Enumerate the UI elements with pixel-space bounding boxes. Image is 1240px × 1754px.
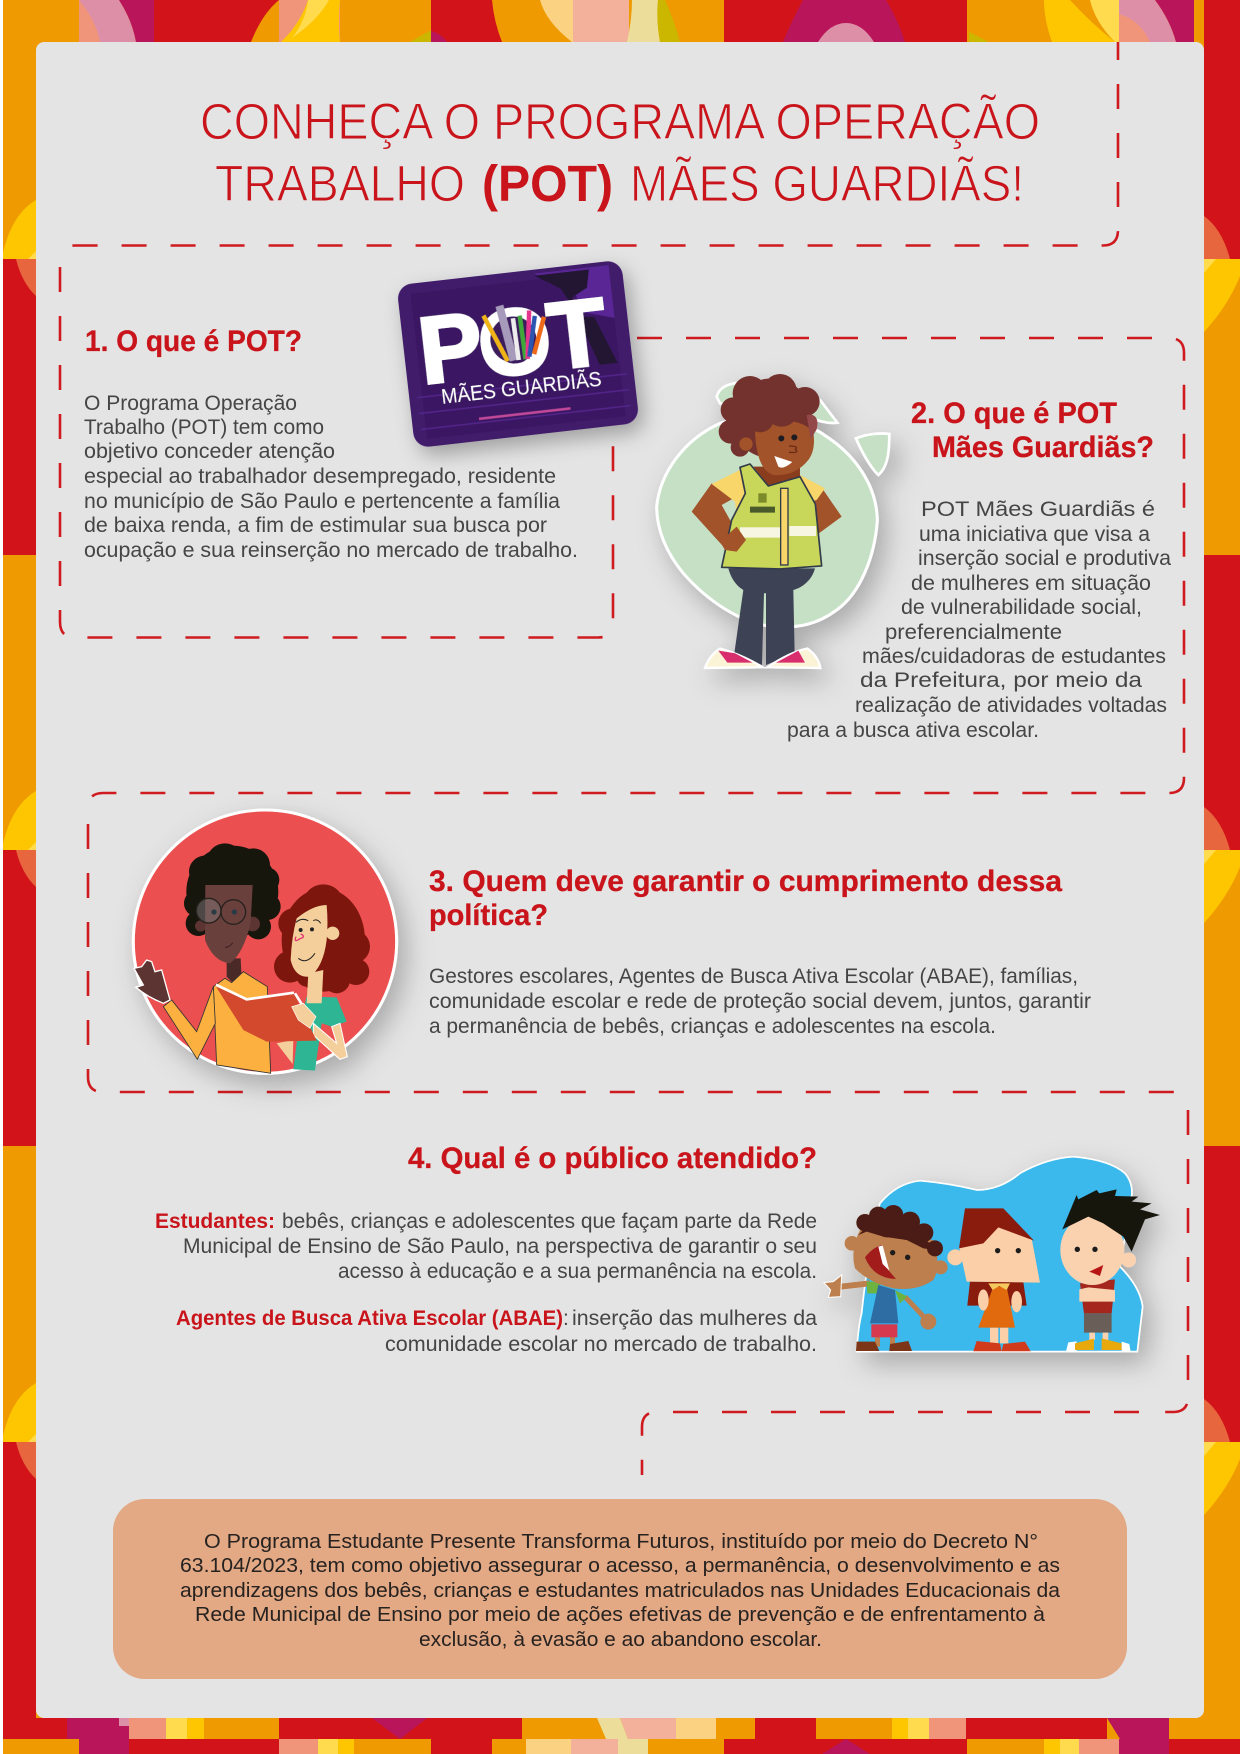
text block: section 3: comunidade escolar e rede de proteção social devem, juntos, garantir [429,990,1091,1013]
callout: Programa Estudante Presente: exclusão, à evasão e ao abandono escolar. [419,1628,822,1651]
book [216,987,317,1042]
text block: section 2: preferencialmente [885,621,1062,644]
title: TRABALHO [215,155,465,212]
text block: section 4: : [563,1307,569,1330]
icon: POT Mães Guardiãs card: T [542,278,612,390]
heading: 1. O que é POT?: 1. O que é POT? [85,325,302,358]
text block: section 4: bebês, crianças e adolescentes que façam parte da Rede [282,1210,817,1233]
text block: section 4: acesso à educação e a sua permanência na escola. [338,1260,817,1283]
icon: POT Mães Guardiãs card: MÃES GUARDIÃS [440,367,603,409]
woman hair [274,884,370,993]
text block: section 2: da Prefeitura, por meio da [860,669,1142,692]
text block: section 2: de vulnerabilidade social, [901,596,1142,619]
text block: section 4 [155,1210,817,1356]
title: MÃES GUARDIÃS! [630,155,1024,212]
text block: section 1: especial ao trabalhador desempregado, residente [84,465,556,488]
heading: 3. Quem deve garantir [429,865,1062,932]
title: CONHEÇA O PROGRAMA OPERAÇÃO [200,93,1040,150]
man shirt and arm [213,972,271,1073]
heading: 2. O que é POT Mães Guardiãs? [911,397,1154,464]
bottom strip [3,1718,1240,1754]
text block: section 3 [429,965,1091,1038]
title [200,93,1040,212]
text block: section 2 [787,498,1171,742]
text block: section 2: realização de atividades voltadas [855,694,1167,717]
text block: section 1: O Programa Operação [84,392,297,415]
text block: section 4: Agentes de Busca Ativa Escolar (ABAE) [176,1307,563,1330]
illustration: two women reading a book [133,810,397,1073]
shoes [705,649,763,668]
icon: POT Mães Guardiãs card: O [472,285,557,399]
heading: 3. Quem deve garantir: 3. Quem deve garantir o cumprimento dessa [429,865,1062,898]
text block: section 2: de mulheres em situação [911,572,1151,595]
icon: POT Mães Guardiãs card [396,260,640,448]
text block: section 4: comunidade escolar no mercado de trabalho. [385,1333,817,1356]
text block: section 4: inserção das mulheres da [572,1307,817,1330]
left column [3,200,36,1739]
callout: Programa Estudante Presente: 63.104/2023, tem como objetivo assegurar o acesso, a permanência, o desenvolvimento e as [180,1554,1060,1577]
heading: 4. Qual é o público atendido?: 4. Qual é o público atendido? [408,1142,817,1175]
pants [728,568,815,665]
title: (POT) [482,155,613,212]
icon: pencils [483,301,548,363]
text block: section 3: a permanência de bebês, crianças e adolescentes na escola. [429,1015,996,1038]
hair [732,378,812,458]
child 1 [824,1205,948,1351]
arms [692,483,747,548]
heading: 3. Quem deve garantir: política? [429,899,548,932]
heading: 2. O que é POT Mães Guardiãs?: 2. O que é POT [911,397,1117,430]
text block: section 4: Estudantes: [155,1210,275,1233]
illustration: woman in safety vest [657,374,889,668]
text block: section 1: de baixa renda, a fim de estimular sua busca por [84,514,547,537]
text block: section 3: Gestores escolares, Agentes de Busca Ativa Escolar (ABAE), famílias, [429,965,1078,988]
vest [722,464,822,569]
illustration: three children [824,1157,1160,1352]
text block: section 1: objetivo conceder atenção [84,440,335,463]
text block: section 1: no município de São Paulo e pertencente a família [84,490,560,513]
child 2 [947,1208,1040,1351]
icon: POT Mães Guardiãs card: P [413,292,488,405]
callout: Programa Estudante Presente: Rede Municipal de Ensino por meio de ações efetivas de prevenção e de enfrentamento à [195,1603,1046,1626]
text block: section 1: Trabalho (POT) tem como [84,416,324,439]
shirt [712,470,825,517]
dashed connector lines [60,42,1188,1475]
callout: Programa Estudante Presente: O Programa Estudante Presente Transforma Futuros, instituído por meio do Decreto N° [204,1530,1038,1553]
heading: 2. O que é POT Mães Guardiãs?: Mães Guardiãs? [932,431,1154,464]
face [755,421,814,475]
text block: section 2: inserção social e produtiva [918,547,1171,570]
text block: section 4: Municipal de Ensino de São Paulo, na perspectiva de garantir o seu [183,1235,817,1258]
text block: section 1: ocupação e sua reinserção no mercado de trabalho. [84,539,578,562]
woman body [293,997,347,1071]
text block: section 2: para a busca ativa escolar. [787,719,1039,742]
text block: section 1 [84,392,578,562]
callout: Programa Estudante Presente: aprendizagens dos bebês, crianças e estudantes matriculados nas Unidades Educacionais da [180,1579,1061,1602]
text block: section 2: uma iniciativa que visa a [919,523,1150,546]
callout: Programa Estudante Presente [113,1499,1127,1679]
child 3 [1060,1189,1160,1352]
text block: section 2: mães/cuidadoras de estudantes [862,645,1166,668]
right column [1204,0,1240,1515]
text block: section 2: POT Mães Guardiãs é [921,498,1155,521]
man hair [184,843,281,939]
hand [720,527,746,552]
top strip [79,0,1194,42]
